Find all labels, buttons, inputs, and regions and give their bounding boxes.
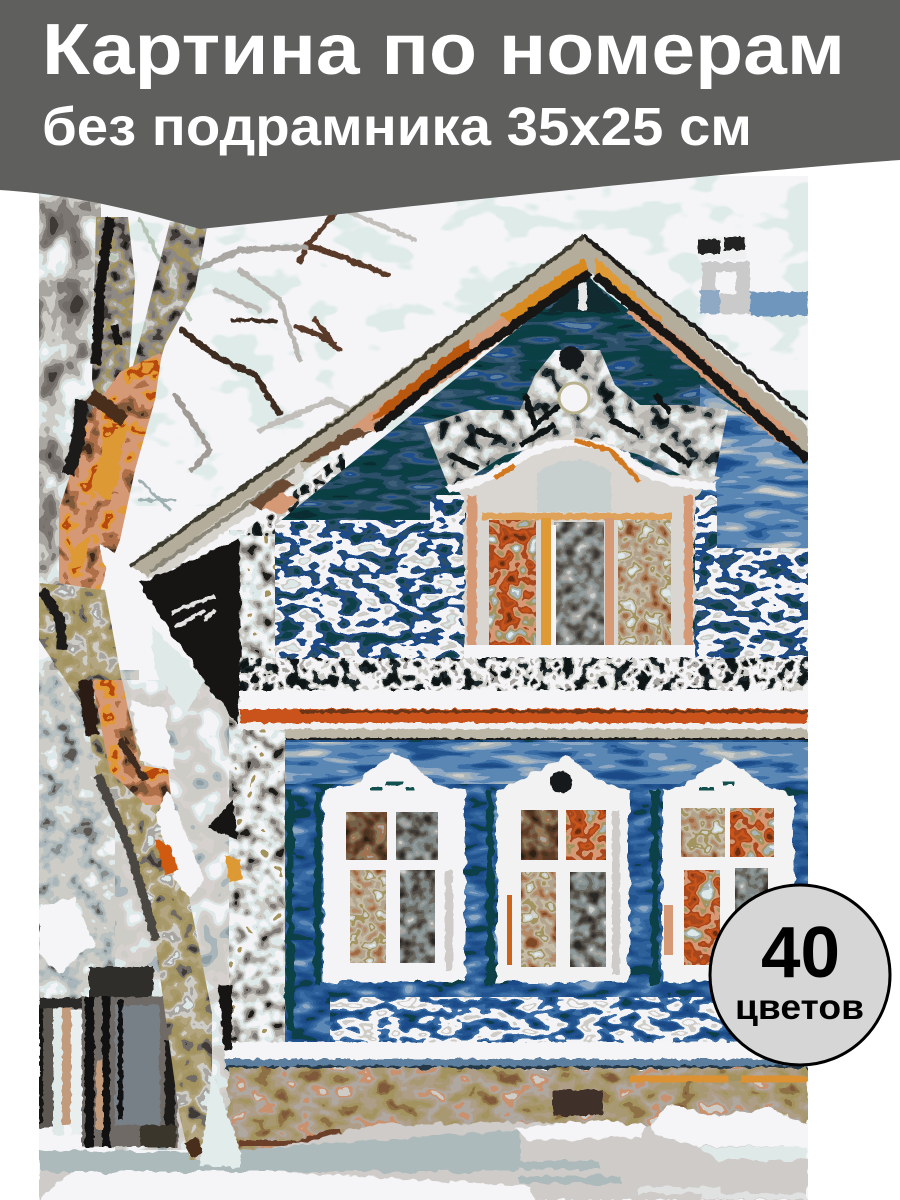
gate body xyxy=(82,997,178,1147)
gable peak xyxy=(548,272,622,312)
background beside trunk xyxy=(115,680,240,1150)
badge: 40 colours xyxy=(710,885,890,1065)
window 2 xyxy=(497,755,629,982)
upper window panes xyxy=(489,520,536,645)
left column of trunk xyxy=(90,215,140,425)
ornament dark circle xyxy=(559,346,583,370)
window 2 frame xyxy=(497,755,629,982)
subtitle: без подрамника 35х25 см xyxy=(42,97,752,157)
ornament white circle xyxy=(559,383,589,413)
lower trunk xyxy=(39,578,219,1163)
upper window xyxy=(444,435,720,661)
gable ornament xyxy=(424,345,728,495)
window 3 xyxy=(662,757,794,982)
gate top xyxy=(89,967,153,997)
ornament black scrolls xyxy=(450,395,690,468)
black marks near corner xyxy=(208,800,238,840)
tree trunk xyxy=(39,215,242,1168)
left background foliage xyxy=(39,190,101,680)
ground snow xyxy=(39,1105,808,1200)
upper window arch xyxy=(537,460,611,512)
pale sky patches xyxy=(129,176,808,506)
basement vent xyxy=(553,1090,602,1116)
left snow lace xyxy=(275,520,430,660)
roof eaves xyxy=(130,236,808,578)
snow patch lower left xyxy=(39,898,96,975)
window 1 frame xyxy=(323,753,465,982)
background branches xyxy=(140,210,415,510)
foundation xyxy=(228,1068,808,1153)
sky background xyxy=(39,176,808,1200)
snow at trunk base xyxy=(200,1070,240,1168)
chimney xyxy=(698,236,808,316)
peach and orange section xyxy=(55,350,165,595)
pickets xyxy=(39,1003,53,1128)
teal shadows xyxy=(290,790,655,1030)
snow lace under windows xyxy=(330,997,738,1043)
top banner xyxy=(0,0,900,229)
lighter wall band xyxy=(285,742,808,784)
orange bark xyxy=(90,425,125,500)
snow on trunk xyxy=(130,700,175,770)
white and orange band xyxy=(240,690,808,742)
white cornice xyxy=(448,442,716,490)
ledge below upper floor xyxy=(240,658,808,690)
window 2 panes xyxy=(521,810,558,860)
right snow lace xyxy=(695,548,808,660)
title: Картина по номерам xyxy=(42,10,845,90)
house snow corner xyxy=(229,530,287,1045)
window 1 xyxy=(323,753,465,982)
lower left background xyxy=(39,670,139,1010)
window 3 frame xyxy=(662,757,794,982)
upper window frame xyxy=(444,435,720,660)
window 3 panes xyxy=(681,808,725,857)
right blue wall xyxy=(700,385,808,555)
lower wall xyxy=(285,740,808,1043)
branch fork xyxy=(125,220,210,400)
dark underside of eave xyxy=(139,540,242,725)
peach section on lower trunk xyxy=(90,678,175,808)
fence xyxy=(39,967,178,1147)
frost around window xyxy=(430,495,465,520)
badge number: 40 xyxy=(761,913,840,993)
painting xyxy=(39,176,808,1200)
badge label: цветов xyxy=(735,988,864,1027)
upper wall xyxy=(275,275,808,690)
grey strip under windows xyxy=(330,988,800,992)
snow strip below fork xyxy=(100,545,175,668)
snow ledge xyxy=(225,1042,808,1070)
window 1 panes xyxy=(346,812,387,860)
shadowed eave corner xyxy=(240,450,345,540)
dark trunk lines xyxy=(42,218,198,1155)
